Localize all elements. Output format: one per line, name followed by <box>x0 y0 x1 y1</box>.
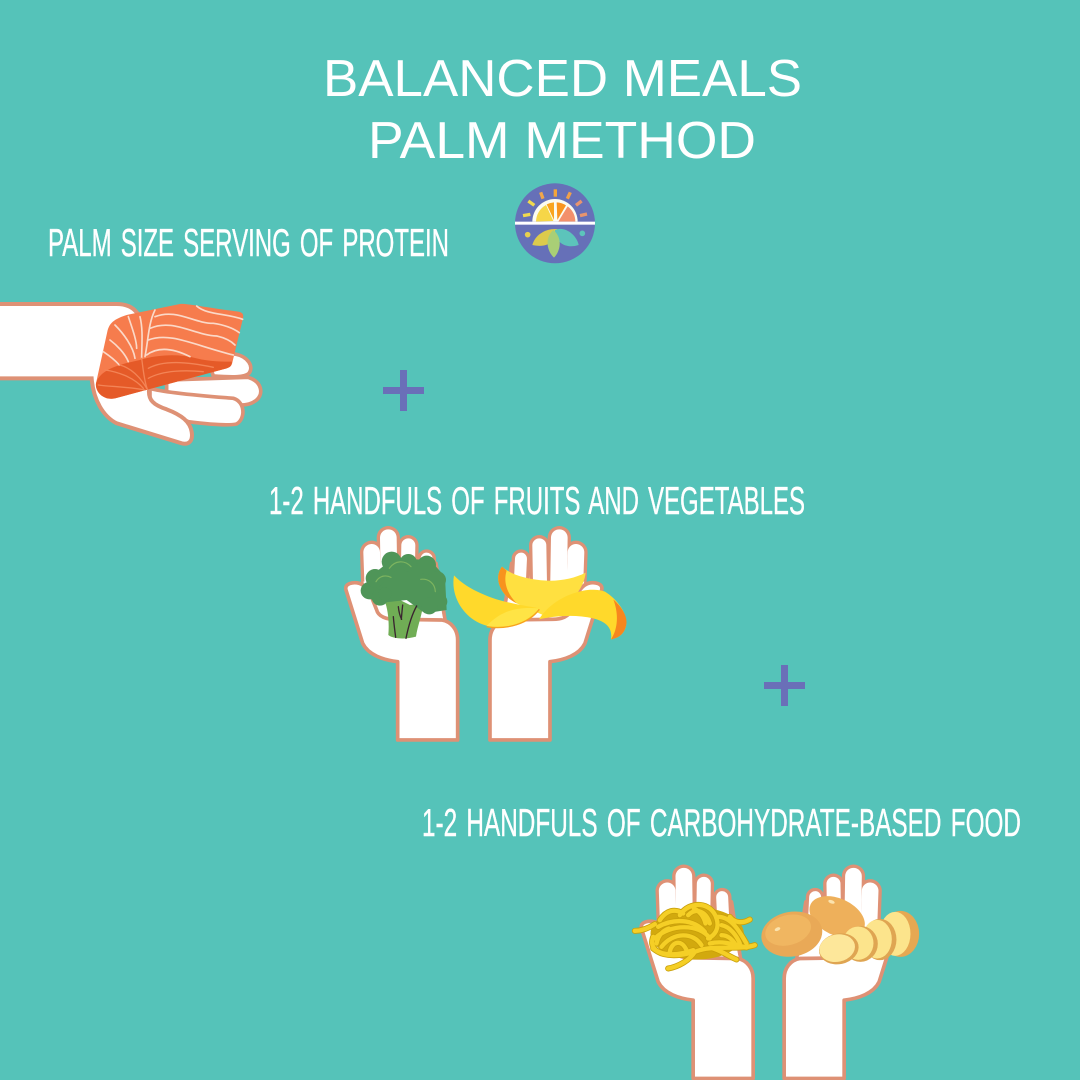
left hand <box>641 876 753 1078</box>
hands with fruit and vegetables <box>346 538 627 740</box>
label: protein: PALM SIZE SERVING OF PROTEIN <box>48 222 449 265</box>
broccoli <box>361 552 447 638</box>
logo: leaves <box>525 229 585 258</box>
hands with noodles and potatoes <box>635 876 919 1078</box>
right hand <box>490 538 602 740</box>
logo <box>515 183 595 263</box>
logo: sun rays <box>523 189 587 216</box>
logo: orange slice <box>532 199 578 222</box>
palm hand with salmon <box>0 304 261 444</box>
noodles <box>635 905 755 968</box>
mango slices <box>453 567 627 639</box>
salmon fillet <box>96 304 243 399</box>
title: BALANCED MEALS <box>323 50 802 108</box>
potatoes <box>758 888 919 968</box>
left hand <box>346 538 458 740</box>
title: PALM METHOD <box>368 112 756 170</box>
right hand <box>784 876 896 1078</box>
plus sign 1 <box>383 370 424 411</box>
title <box>323 50 802 170</box>
hand <box>0 304 261 444</box>
plus sign 2 <box>764 665 805 706</box>
